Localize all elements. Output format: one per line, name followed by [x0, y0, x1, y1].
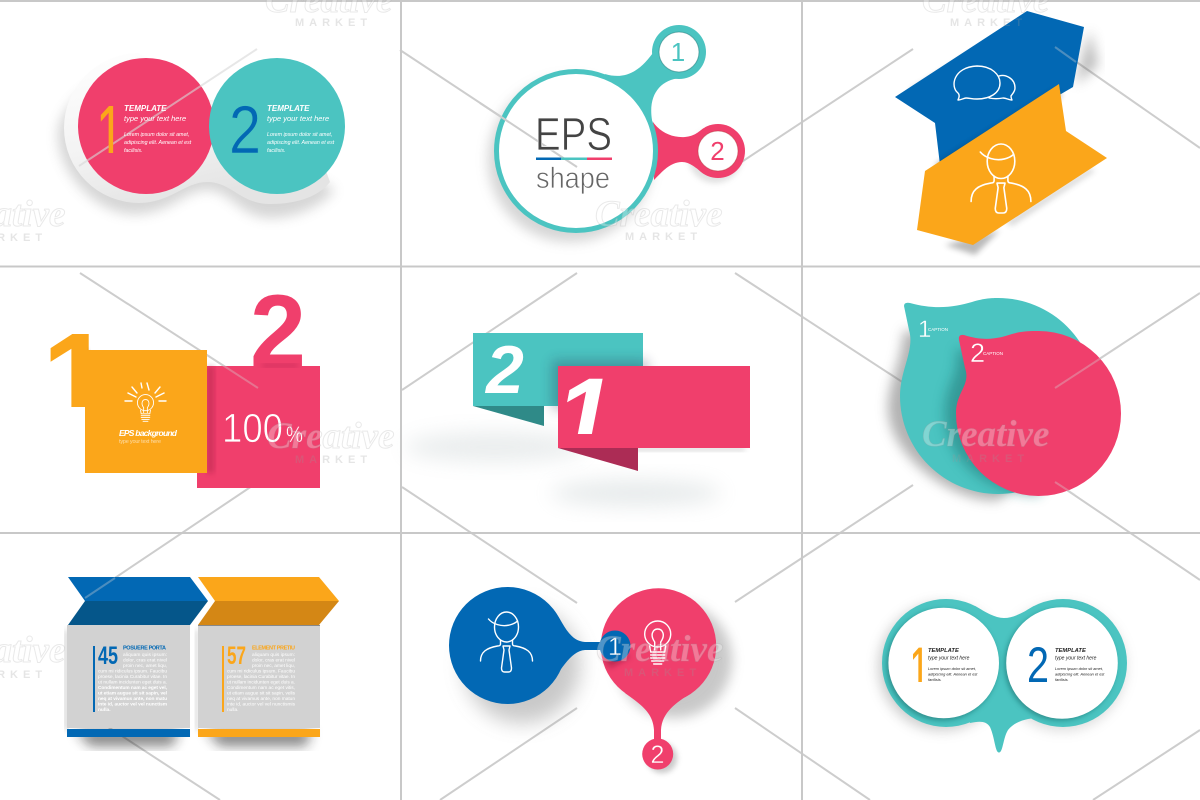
text block 1: Lorem ipsum dolor sit amet,: [124, 132, 189, 138]
watermarks: MARKET: [295, 17, 372, 29]
text block 1: [124, 104, 192, 154]
number 1: 1: [42, 307, 112, 448]
teal circle: [209, 58, 345, 194]
pink bubble with drop: [601, 588, 716, 770]
icon: man: [971, 144, 1031, 213]
text block 2: adipiscing elit. Aenean et est: [267, 140, 335, 146]
number 2: 2: [1027, 637, 1049, 693]
100 percent: %: [286, 422, 303, 447]
panel: connected bubbles: [449, 587, 732, 773]
watermarks: Creative: [267, 416, 394, 457]
body text: neq at vivamus ante, non matu: [98, 696, 167, 702]
number 2: 2: [250, 274, 306, 388]
icon: chat bubbles: [954, 66, 1015, 100]
watermarks: MARKET: [295, 454, 372, 466]
panel: EPS shape metaball: [480, 25, 745, 242]
body text: inte id, auctor vel vel nunctism: [98, 702, 167, 708]
body text: proin nec, amet liqu,: [123, 663, 167, 669]
icon: man: [480, 612, 532, 672]
translucent line overlays: [79, 47, 1121, 722]
card 1: [67, 577, 208, 737]
watermarks: Creative: [596, 629, 723, 670]
text block 1: type your text here: [928, 656, 970, 662]
panel: arrow text cards: [65, 577, 339, 746]
blue bubble with connector: [449, 587, 630, 704]
white circle 2: [1006, 607, 1118, 719]
number 45: 45: [98, 642, 118, 670]
orange square: [85, 350, 207, 473]
pink square: [197, 366, 320, 488]
tricolor divider: [536, 158, 612, 160]
EPS title: EPS: [535, 108, 612, 160]
text block 1: TEMPLATE: [928, 648, 960, 654]
orange arrow: [917, 84, 1107, 245]
caption: type your text here: [119, 439, 161, 445]
caption 1: CAPTION: [928, 327, 948, 332]
100 percent: 100: [222, 405, 283, 451]
body text: ut etiam augue sit sit sapin, vel: [98, 691, 167, 697]
panel: two circles template: [58, 49, 345, 218]
body text: [98, 646, 168, 713]
text block 2: Lorem ipsum dolor sit amet,: [1055, 666, 1103, 671]
pink connector and node: [653, 122, 745, 180]
body text: nulla.: [227, 707, 238, 713]
body text: inte id, auctor vel vel nunctismis: [227, 702, 296, 708]
teal connector and node: [605, 25, 706, 130]
number 1: 1: [910, 636, 929, 700]
card 2: [198, 577, 339, 737]
panel: twin white circles with pin: [878, 599, 1127, 752]
white circle 1: [888, 608, 999, 718]
watermarks: MARKET: [950, 17, 1027, 29]
pink drop: [956, 331, 1121, 496]
text block 2: facilisis.: [267, 148, 286, 154]
teal ribbon: [473, 332, 643, 426]
body text: ut nullam incidunten eget duis a.: [227, 679, 295, 685]
watermarks: Creative: [922, 414, 1049, 455]
body text: POSUERE PORTA: [123, 646, 166, 652]
text block 1: facilisis.: [928, 677, 942, 682]
body text: cum mi ridiculus ipsum. Faucibu: [98, 668, 167, 674]
icon: light bulb: [645, 621, 671, 664]
shape label: shape: [536, 162, 610, 195]
panel: folded arrows: [895, 11, 1107, 255]
panel: numbered squares: [50, 294, 320, 488]
panel: ribbon banners: [405, 332, 750, 506]
text block 2: TEMPLATE: [1055, 648, 1087, 654]
text block 1: adipiscing elit. Aenean et est: [928, 672, 978, 676]
watermarks: Creative: [595, 194, 722, 235]
teal connector and node: 1: [671, 37, 685, 67]
body text: dolor, cras erat nivel: [123, 657, 167, 663]
watermarks: [0, 0, 1049, 681]
body text: ut etiam augue sit sit sapin, velis: [227, 691, 296, 697]
text block 2: facilisis.: [1055, 677, 1069, 682]
teal ribbon: 2: [484, 332, 524, 408]
caption 2: CAPTION: [983, 351, 1003, 356]
big circle: [496, 72, 656, 230]
number 2: 2: [229, 92, 261, 168]
text block 1: [928, 648, 978, 682]
text block 2: type your text here: [1055, 656, 1097, 662]
body text: ut nullam incidunten eget duis a.: [98, 679, 167, 685]
body text: Condimentum nam ac eget vel,: [98, 685, 168, 691]
text block 2: [1055, 648, 1105, 682]
number 57: 57: [227, 642, 246, 670]
blue arrow: [895, 11, 1084, 165]
watermarks: MARKET: [625, 231, 702, 243]
panel: overlapping drops: [888, 298, 1121, 500]
caption: EPS background: [119, 428, 178, 438]
pink connector and node: 2: [710, 136, 725, 166]
teal base shape: [882, 599, 1127, 752]
body text: Condimentum nam ac eget vitis,: [227, 685, 295, 691]
body text: cum mi ridiculus ipsum. Faucibu: [227, 668, 295, 674]
body text: ELEMENT PRETIU: [252, 646, 295, 652]
icon: light bulb with rays: [125, 383, 166, 421]
body text: nulla.: [98, 707, 111, 713]
caption 1: [918, 316, 948, 343]
pink ribbon: 1: [556, 357, 613, 471]
body text: neq at vivamus ante, non matun: [227, 696, 295, 702]
number 1: 1: [96, 89, 124, 178]
text block 1: type your text here: [124, 114, 186, 123]
pink bubble with drop: 2: [651, 741, 664, 769]
text block 2: Lorem ipsum dolor sit amet,: [267, 132, 332, 138]
body text: aliquam quis ipsum:: [123, 652, 167, 658]
text block 2: TEMPLATE: [267, 104, 310, 113]
body text: proese, lacinia Curabitur vitae. In: [227, 674, 295, 680]
body text: proin nec, amet liqu,: [252, 663, 295, 669]
text block 1: adipiscing elit. Aenean et est: [124, 140, 192, 146]
text block 1: facilisis.: [124, 148, 143, 154]
text block 2: type your text here: [267, 114, 329, 123]
teal drop: [900, 298, 1096, 494]
pink circle: [78, 58, 214, 194]
blue bubble with connector: 1: [608, 633, 622, 661]
caption: [119, 428, 178, 445]
caption 2: 2: [970, 338, 985, 368]
caption 2: [970, 338, 1003, 368]
body text: [227, 646, 296, 713]
text block 2: [267, 104, 335, 154]
watermarks: MARKET: [624, 667, 701, 679]
body text: dolor, cras erat nivel: [252, 657, 295, 663]
text block 2: adipiscing elit. Aenean et est: [1055, 672, 1105, 676]
watermarks: MARKET: [952, 453, 1029, 465]
body text: aliquam quis ipsum:: [252, 652, 295, 658]
body text: proese, lacinia Curabitur vitae. In: [98, 674, 167, 680]
pink ribbon: [556, 357, 750, 471]
text block 1: TEMPLATE: [124, 104, 167, 113]
caption 1: 1: [918, 316, 931, 343]
text block 1: Lorem ipsum dolor sit amet,: [928, 666, 976, 671]
